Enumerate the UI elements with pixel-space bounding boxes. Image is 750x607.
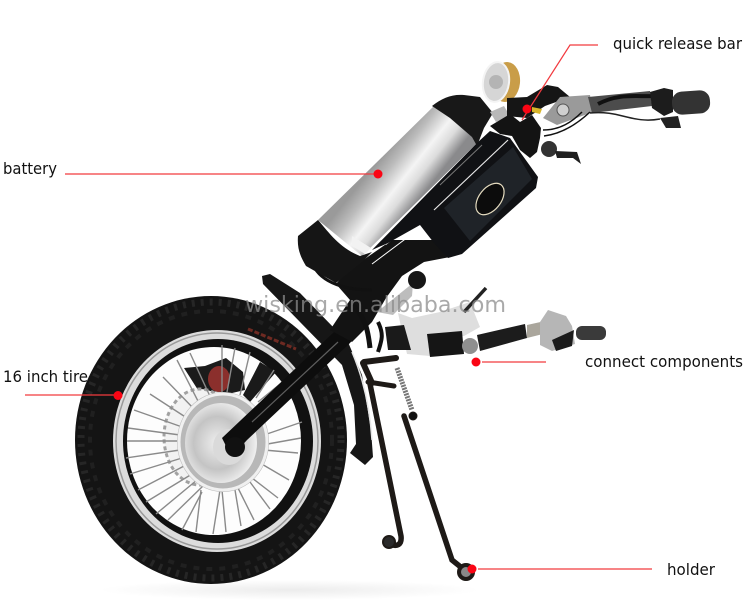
callout: battery: battery bbox=[3, 159, 57, 178]
grip bbox=[576, 326, 606, 340]
headlight bbox=[480, 60, 522, 104]
silver stem bbox=[543, 95, 593, 125]
steering column bbox=[312, 220, 450, 352]
battery bottom cap bbox=[298, 220, 372, 283]
clamp bbox=[540, 310, 575, 351]
brake lever bbox=[555, 151, 581, 164]
tire bbox=[75, 296, 347, 584]
tire sidewall lettering bbox=[248, 329, 296, 349]
kickstand bbox=[363, 358, 473, 579]
callout: holder bbox=[468, 560, 715, 579]
callout: 16 inch tire: 16 inch tire bbox=[3, 367, 88, 386]
wires bbox=[312, 262, 372, 290]
spring bbox=[397, 368, 412, 410]
mount bracket bbox=[398, 302, 480, 356]
rim bbox=[113, 330, 321, 552]
handlebar bbox=[490, 85, 711, 164]
battery top cap bbox=[432, 95, 493, 146]
controller box bbox=[372, 131, 538, 258]
right grip bbox=[650, 88, 673, 116]
torque arm bbox=[243, 362, 276, 402]
front wheel bbox=[75, 296, 347, 584]
quick release clamp bbox=[507, 85, 570, 118]
callout: quick release bar: quick release bar bbox=[613, 34, 742, 53]
fender bbox=[262, 274, 373, 465]
silver steering tube bbox=[377, 283, 413, 315]
hub motor bbox=[177, 392, 269, 492]
callout: quick release bar bbox=[522, 34, 742, 120]
light bracket and black column bbox=[490, 106, 510, 122]
connector arm bbox=[477, 324, 527, 351]
brake disc bbox=[164, 389, 236, 485]
collar bbox=[408, 271, 426, 289]
battery silver body bbox=[318, 104, 479, 256]
callout: holder: holder bbox=[667, 560, 715, 579]
connect components bbox=[385, 288, 606, 357]
controller logo bbox=[470, 178, 510, 220]
crossbar bbox=[368, 382, 394, 386]
callout: 16 inch tire bbox=[3, 367, 122, 400]
spokes bbox=[126, 345, 302, 534]
battery label bbox=[352, 236, 371, 254]
floor shadow bbox=[100, 580, 480, 600]
front fork bbox=[222, 298, 378, 457]
callout: connect components bbox=[472, 352, 743, 371]
callout: connect components: connect components bbox=[585, 352, 743, 371]
rear leg bbox=[370, 384, 401, 545]
shift knob bbox=[541, 141, 557, 157]
battery bbox=[298, 95, 493, 283]
watermark: wisking.en.alibaba.com bbox=[245, 293, 506, 318]
brake caliper bbox=[184, 358, 245, 393]
callout: battery bbox=[3, 159, 382, 178]
tube between battery and controller bbox=[385, 220, 414, 244]
front leg bbox=[404, 416, 462, 568]
bar and cables bbox=[588, 91, 652, 113]
